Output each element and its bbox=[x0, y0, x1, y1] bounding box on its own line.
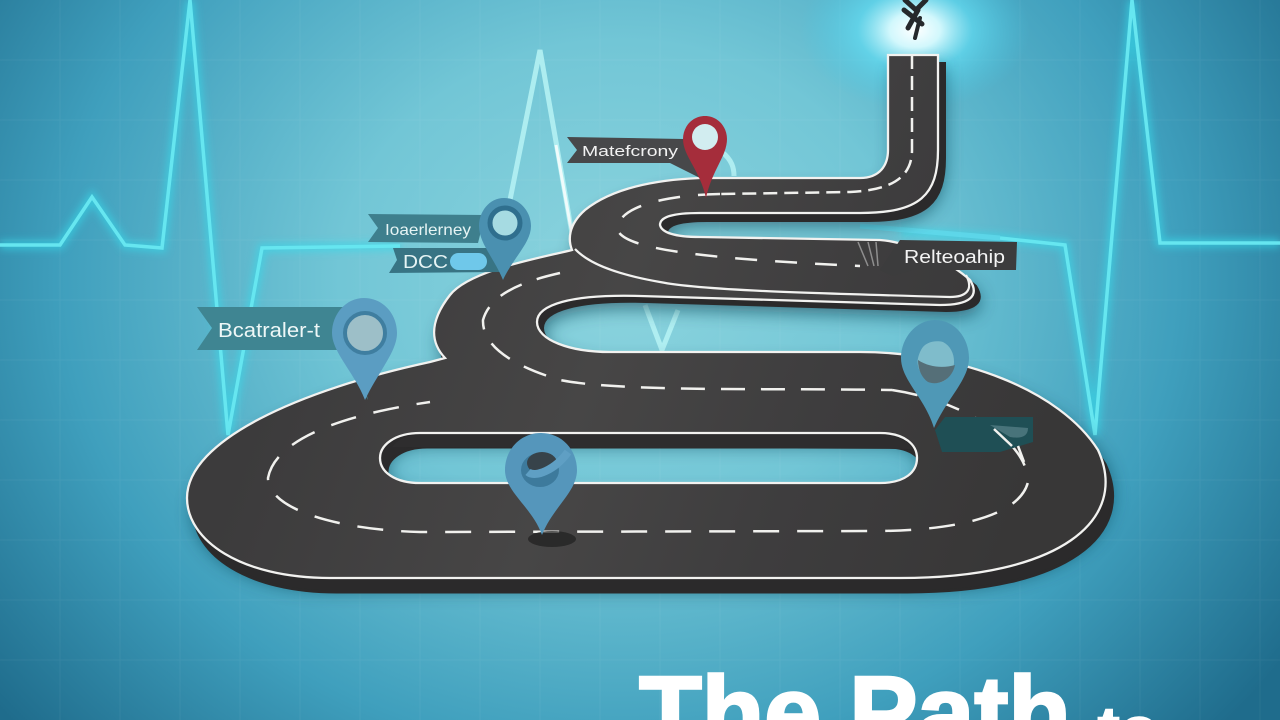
summit figure icon bbox=[904, 0, 926, 38]
pin: blue upper bbox=[479, 198, 531, 280]
ECG heartbeat line bbox=[0, 0, 1280, 435]
ribbon: Ioaerlerney: Ioaerlerney bbox=[385, 222, 471, 239]
ribbon: Relteoahip bbox=[880, 240, 1017, 276]
pin: blue left bbox=[332, 298, 397, 400]
glow at road end bbox=[800, 0, 1030, 110]
ribbon: Relteoahip: Relteoahip bbox=[904, 247, 1005, 267]
ribbon: Bcatraler-t: Bcatraler-t bbox=[218, 320, 320, 342]
road wall upper bbox=[661, 62, 946, 232]
ribbon: Matefcrony bbox=[567, 137, 700, 178]
road surface bbox=[187, 55, 1106, 578]
ribbon: DCC bbox=[389, 248, 500, 273]
ribbon: Bcatraler-t bbox=[197, 307, 368, 400]
road shadow bbox=[193, 67, 1112, 590]
road wall middle bbox=[538, 281, 981, 336]
dark teal label box bbox=[935, 417, 1033, 462]
pin: red bbox=[683, 116, 727, 198]
ribbon: Ioaerlerney bbox=[368, 214, 485, 243]
pin: blue bottom bbox=[505, 433, 577, 535]
road sign marks bbox=[858, 242, 878, 266]
road centre dashes bbox=[268, 55, 1028, 532]
ribbon: DCC: DCC bbox=[403, 252, 448, 272]
road wall lower bbox=[194, 354, 1114, 594]
pin: bottom marker shadow bbox=[528, 531, 576, 547]
ribbon: Matefcrony: Matefcrony bbox=[582, 143, 679, 160]
upper hairpin lower edge bbox=[575, 249, 969, 297]
pin: blue right bbox=[901, 320, 969, 428]
pill badge bbox=[450, 253, 487, 270]
road hole inner wall bbox=[392, 435, 912, 449]
winding road bbox=[187, 55, 1113, 592]
